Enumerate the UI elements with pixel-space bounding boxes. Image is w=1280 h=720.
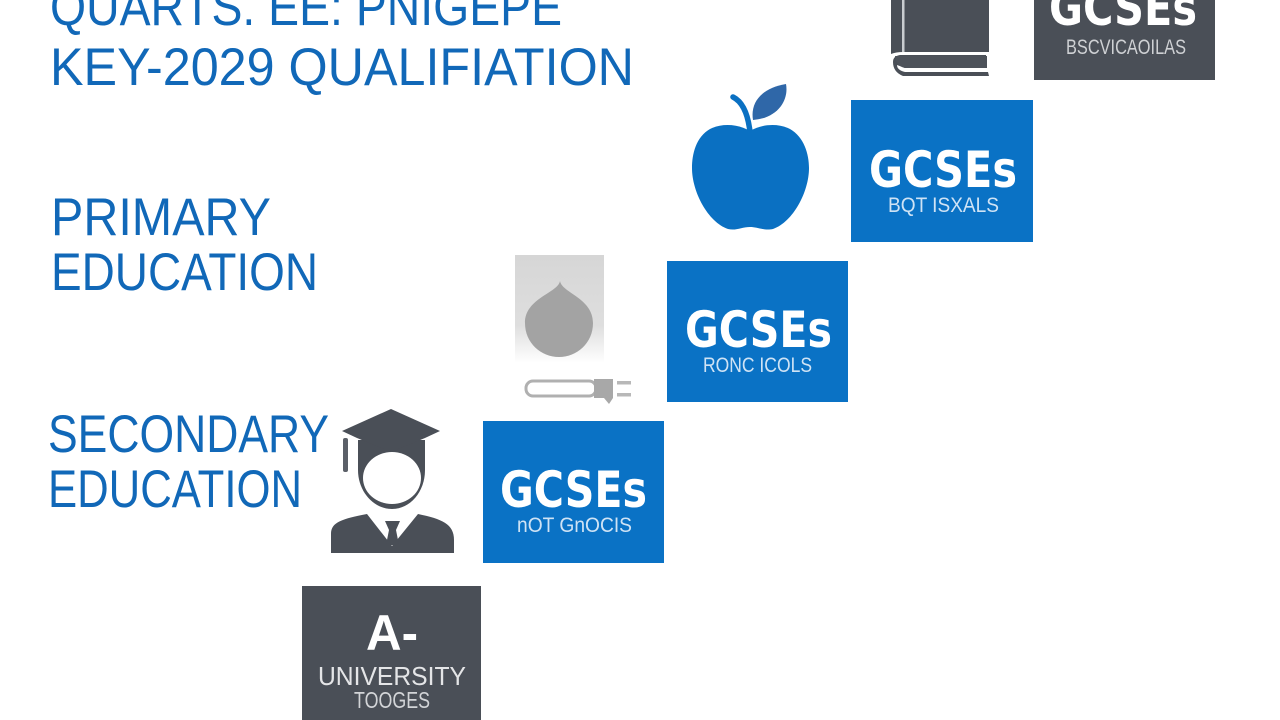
step: top gray GCSEs box (1034, 0, 1215, 80)
step: blue GCSEs box middle (667, 261, 848, 402)
step: blue GCSEs box lower (483, 421, 664, 563)
step: top gray GCSEs box: BSCVICAOILAS (1066, 36, 1186, 59)
step: blue GCSEs box middle: GCSEs (685, 301, 832, 359)
step: blue GCSEs box upper: GCSEs (869, 141, 1017, 199)
step: gray A-level university box: UNIVERSITY (318, 661, 466, 691)
step: gray A-level university box: A- (366, 605, 418, 661)
heading: primary education (51, 188, 318, 302)
heading: secondary education: SECONDARY (48, 405, 329, 464)
heading: secondary education (48, 405, 329, 519)
step: blue GCSEs box lower: GCSEs (500, 461, 647, 519)
title: KEY-2029 QUALIFIATION (50, 38, 634, 97)
icon: gray drop and pen (515, 255, 631, 404)
icon: book (891, 0, 989, 76)
step: blue GCSEs box lower: nOT GnOCIS (517, 514, 632, 537)
heading: primary education: EDUCATION (51, 243, 318, 302)
icon: apple (692, 84, 809, 230)
step: gray A-level university box: TOOGES (354, 687, 430, 713)
step: gray A-level university box (302, 586, 481, 720)
title (50, 0, 634, 97)
icon: graduate (331, 409, 454, 553)
heading: secondary education: EDUCATION (48, 460, 302, 519)
heading: primary education: PRIMARY (51, 188, 271, 247)
step: blue GCSEs box middle: RONC ICOLS (703, 354, 812, 377)
step: blue GCSEs box upper (851, 100, 1033, 242)
step: blue GCSEs box upper: BQT ISXALS (888, 194, 999, 217)
